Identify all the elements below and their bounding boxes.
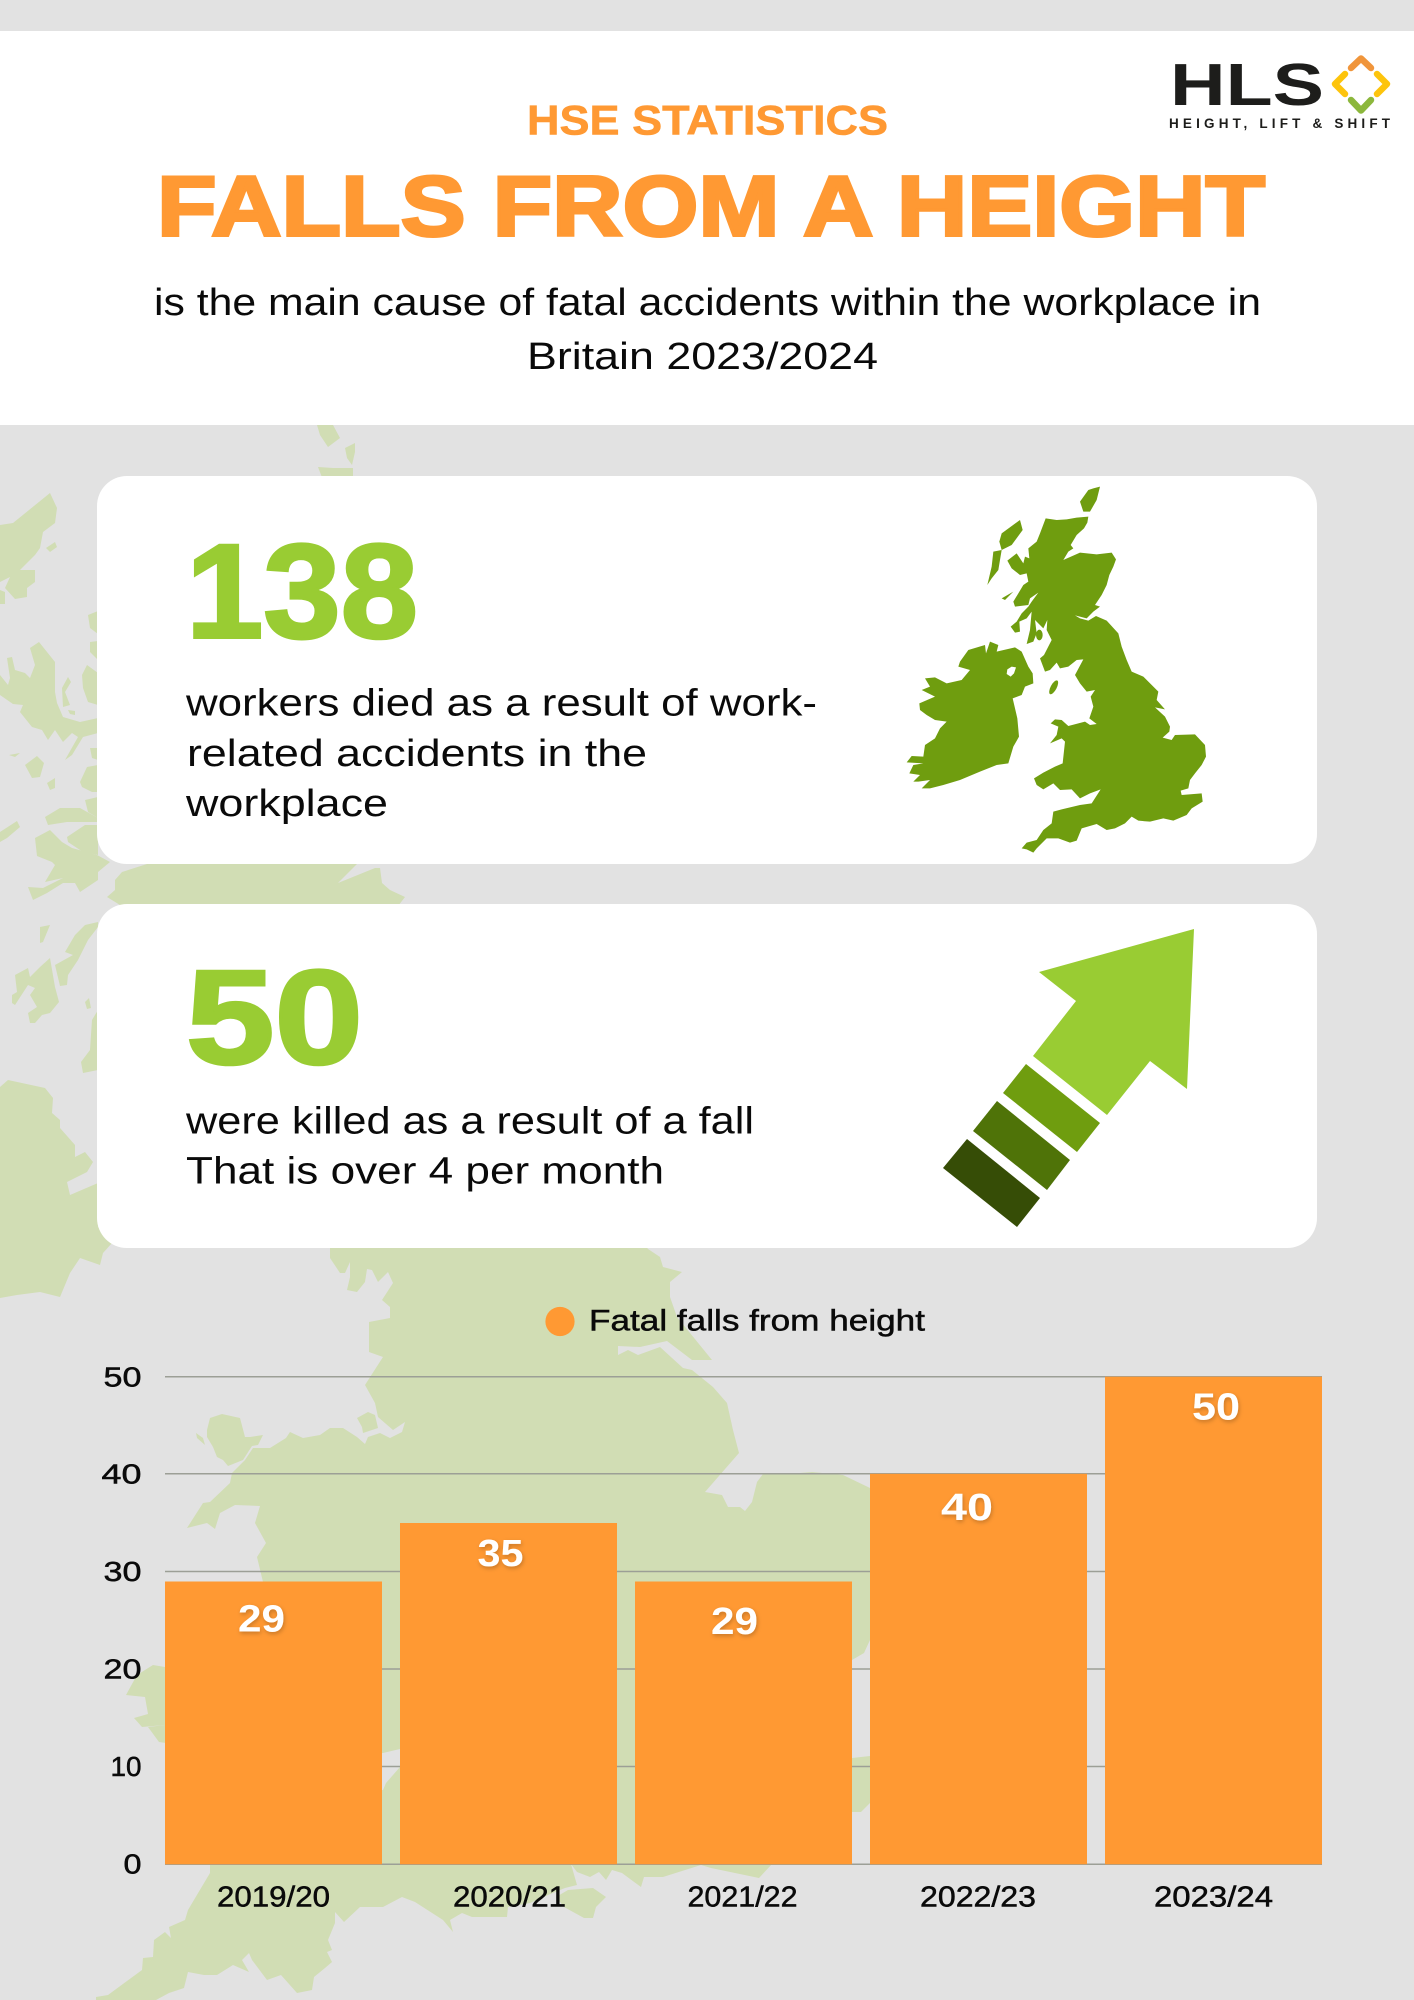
logo: HLS Height, Lift & Shift: HEIGHT, LIFT & SHIFT <box>1169 116 1391 131</box>
data labels <box>238 1386 1240 1643</box>
panel: 50 killed by a fall <box>97 904 1317 1248</box>
x axis labels <box>217 1882 1273 1914</box>
chart legend: Fatal falls from height <box>589 1304 926 1338</box>
x axis labels: 2019/20 <box>217 1882 330 1914</box>
y axis labels: 20 <box>104 1654 142 1684</box>
text block: workers died: workplace <box>185 783 388 825</box>
x axis labels: 2020/21 <box>453 1882 566 1914</box>
data labels: 40 <box>941 1487 993 1529</box>
text block: killed as a result of a fall: were killed as a result of a fall <box>185 1100 754 1142</box>
y axis labels: 30 <box>104 1556 142 1587</box>
heading: HSE statistics: HSE STATISTICS <box>527 97 888 144</box>
background map of Britain and Ireland <box>0 425 1000 2000</box>
subtitle line 2: Britain 2023/2024 <box>527 336 878 378</box>
statistic: 50: 50 <box>186 944 363 1092</box>
panel: 138 workers <box>97 476 1317 864</box>
y axis labels: 40 <box>102 1458 142 1490</box>
x axis labels: 2023/24 <box>1154 1882 1273 1914</box>
data labels: 29 <box>238 1598 285 1640</box>
y axis labels <box>102 1362 142 1880</box>
text block: workers died: workers died as a result of work- <box>185 682 817 724</box>
bars <box>165 1377 1322 1864</box>
data labels: 29 <box>711 1601 758 1643</box>
statistic: 138: 138 <box>186 518 418 666</box>
logo: HLS Height, Lift & Shift: HLS <box>1170 52 1324 118</box>
icon: map of UK and Ireland <box>907 487 1206 853</box>
y axis labels: 50 <box>104 1362 142 1392</box>
text block: workers died <box>185 682 817 825</box>
y axis labels: 0 <box>124 1848 142 1880</box>
y axis labels: 10 <box>110 1751 142 1782</box>
data labels: 50 <box>1192 1386 1240 1428</box>
logo: HLS Height, Lift & Shift <box>1169 52 1391 131</box>
x axis labels: 2022/23 <box>920 1882 1036 1914</box>
text block: killed as a result of a fall: That is over 4 per month <box>186 1150 664 1192</box>
header panel <box>0 31 1414 425</box>
subtitle line 1: is the main cause of fatal accidents within the workplace in <box>154 282 1261 324</box>
icon: rising arrow <box>943 929 1194 1227</box>
data labels: 35 <box>478 1533 524 1575</box>
text block: workers died: related accidents in the <box>187 733 647 775</box>
title: FALLS FROM A HEIGHT <box>157 160 1265 254</box>
x axis labels: 2021/22 <box>688 1882 798 1914</box>
text block: killed as a result of a fall <box>185 1100 754 1192</box>
bar chart: fatal falls from height <box>102 1304 1322 1914</box>
